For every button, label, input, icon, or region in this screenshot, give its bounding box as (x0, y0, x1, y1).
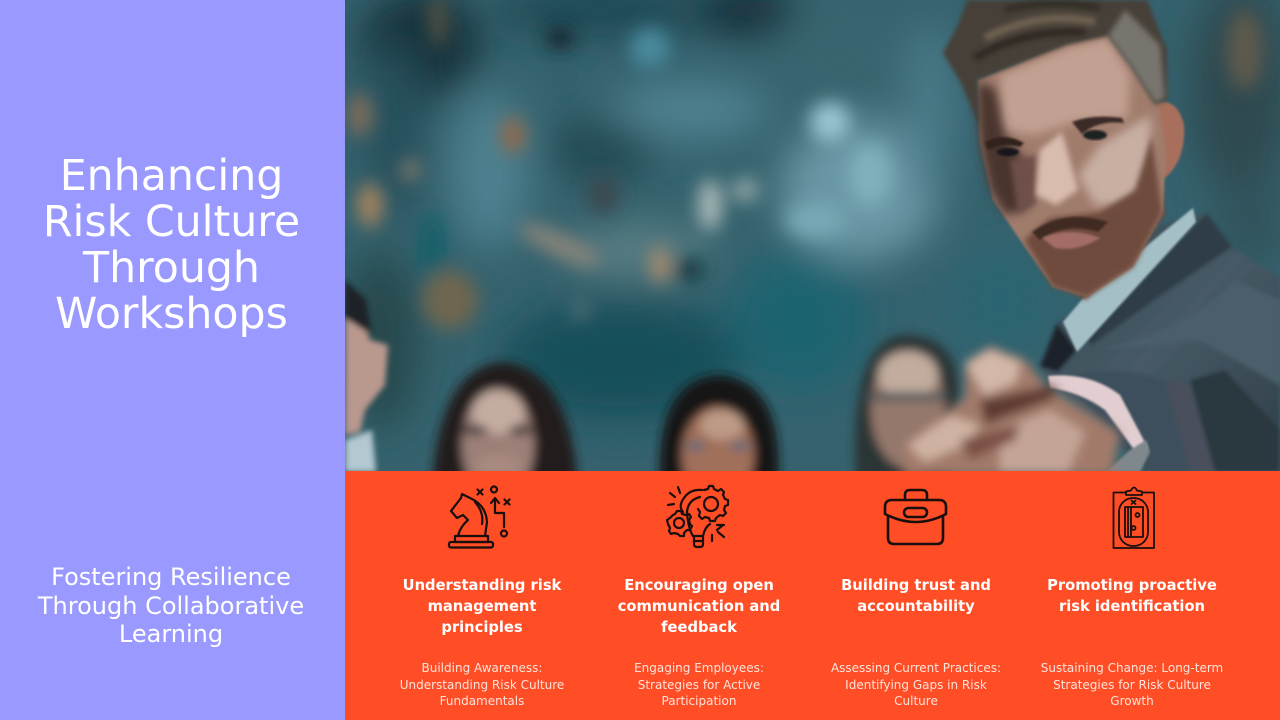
audience: woman (432, 362, 578, 501)
column 1 heading (403, 576, 562, 636)
title: Workshops (55, 288, 288, 338)
column 4 text (1041, 661, 1223, 708)
column 2 heading (618, 576, 780, 636)
audience: right man (855, 335, 958, 480)
title (43, 150, 300, 338)
column 4 heading: risk identification (1059, 598, 1205, 614)
column 3 text: Culture (894, 694, 938, 708)
column 3 text: Assessing Current Practices: (831, 661, 1001, 675)
icon: chess knight strategy (449, 486, 510, 548)
column 4 heading: Promoting proactive (1047, 576, 1217, 594)
column 2 text: Engaging Employees: (634, 661, 764, 675)
icons row (448, 484, 1155, 549)
title: Enhancing (60, 150, 283, 200)
man: hair highlights (975, 3, 1165, 103)
subtitle: Learning (119, 620, 223, 648)
column 3 heading: accountability (857, 598, 975, 614)
subtitle: Through Collaborative (38, 592, 304, 620)
man: shirt collar (1063, 208, 1196, 352)
man: watch (1106, 440, 1150, 472)
man: shirt cuff (1048, 375, 1148, 455)
column 4 text: Sustaining Change: Long-term (1041, 661, 1223, 675)
man: face (977, 33, 1166, 297)
man: hair (943, 0, 1167, 128)
column 1 text: Understanding Risk Culture (400, 678, 564, 692)
background wall (340, 0, 1280, 471)
icon: briefcase (885, 490, 946, 544)
icon: lightbulb with gears (667, 486, 728, 547)
column 1 text: Fundamentals (440, 694, 524, 708)
photo: man pointing at blurred audience (345, 0, 1280, 471)
column 1 heading: Understanding risk (403, 576, 561, 594)
column 1 heading: management (428, 598, 536, 614)
panel: title sidebar (0, 0, 345, 720)
column 2 text: Participation (662, 694, 736, 708)
column 1 text (400, 661, 564, 708)
subtitle: Fostering Resilience (51, 563, 291, 591)
column 2 heading: feedback (661, 618, 737, 636)
man: pointing hand (903, 346, 1120, 475)
column 1 text: Building Awareness: (422, 661, 542, 675)
subtitle (38, 563, 304, 648)
column 1 heading: principles (441, 618, 523, 636)
column 3 heading: Building trust and (841, 576, 991, 594)
column 2 heading: communication and (618, 598, 780, 614)
audience: left person (345, 280, 388, 472)
man: neck (1065, 180, 1165, 300)
column 3 text (831, 661, 1001, 708)
column 2 text (634, 661, 764, 708)
title: Risk Culture (43, 196, 300, 246)
man: ear (1155, 101, 1184, 178)
column 2 heading: Encouraging open (624, 576, 774, 594)
man: suit (1040, 213, 1280, 472)
column 4 text: Growth (1110, 694, 1154, 708)
column 4 heading (1047, 576, 1217, 614)
icon: clipboard with sharpener (1114, 488, 1154, 548)
column 2 text: Strategies for Active (638, 678, 760, 692)
audience: centre person (660, 375, 779, 503)
column 3 heading (841, 576, 991, 614)
column 3 text: Identifying Gaps in Risk (845, 678, 987, 692)
panel: orange key points band (345, 471, 1280, 720)
column 4 text: Strategies for Risk Culture (1053, 678, 1211, 692)
title: Through (83, 242, 260, 292)
